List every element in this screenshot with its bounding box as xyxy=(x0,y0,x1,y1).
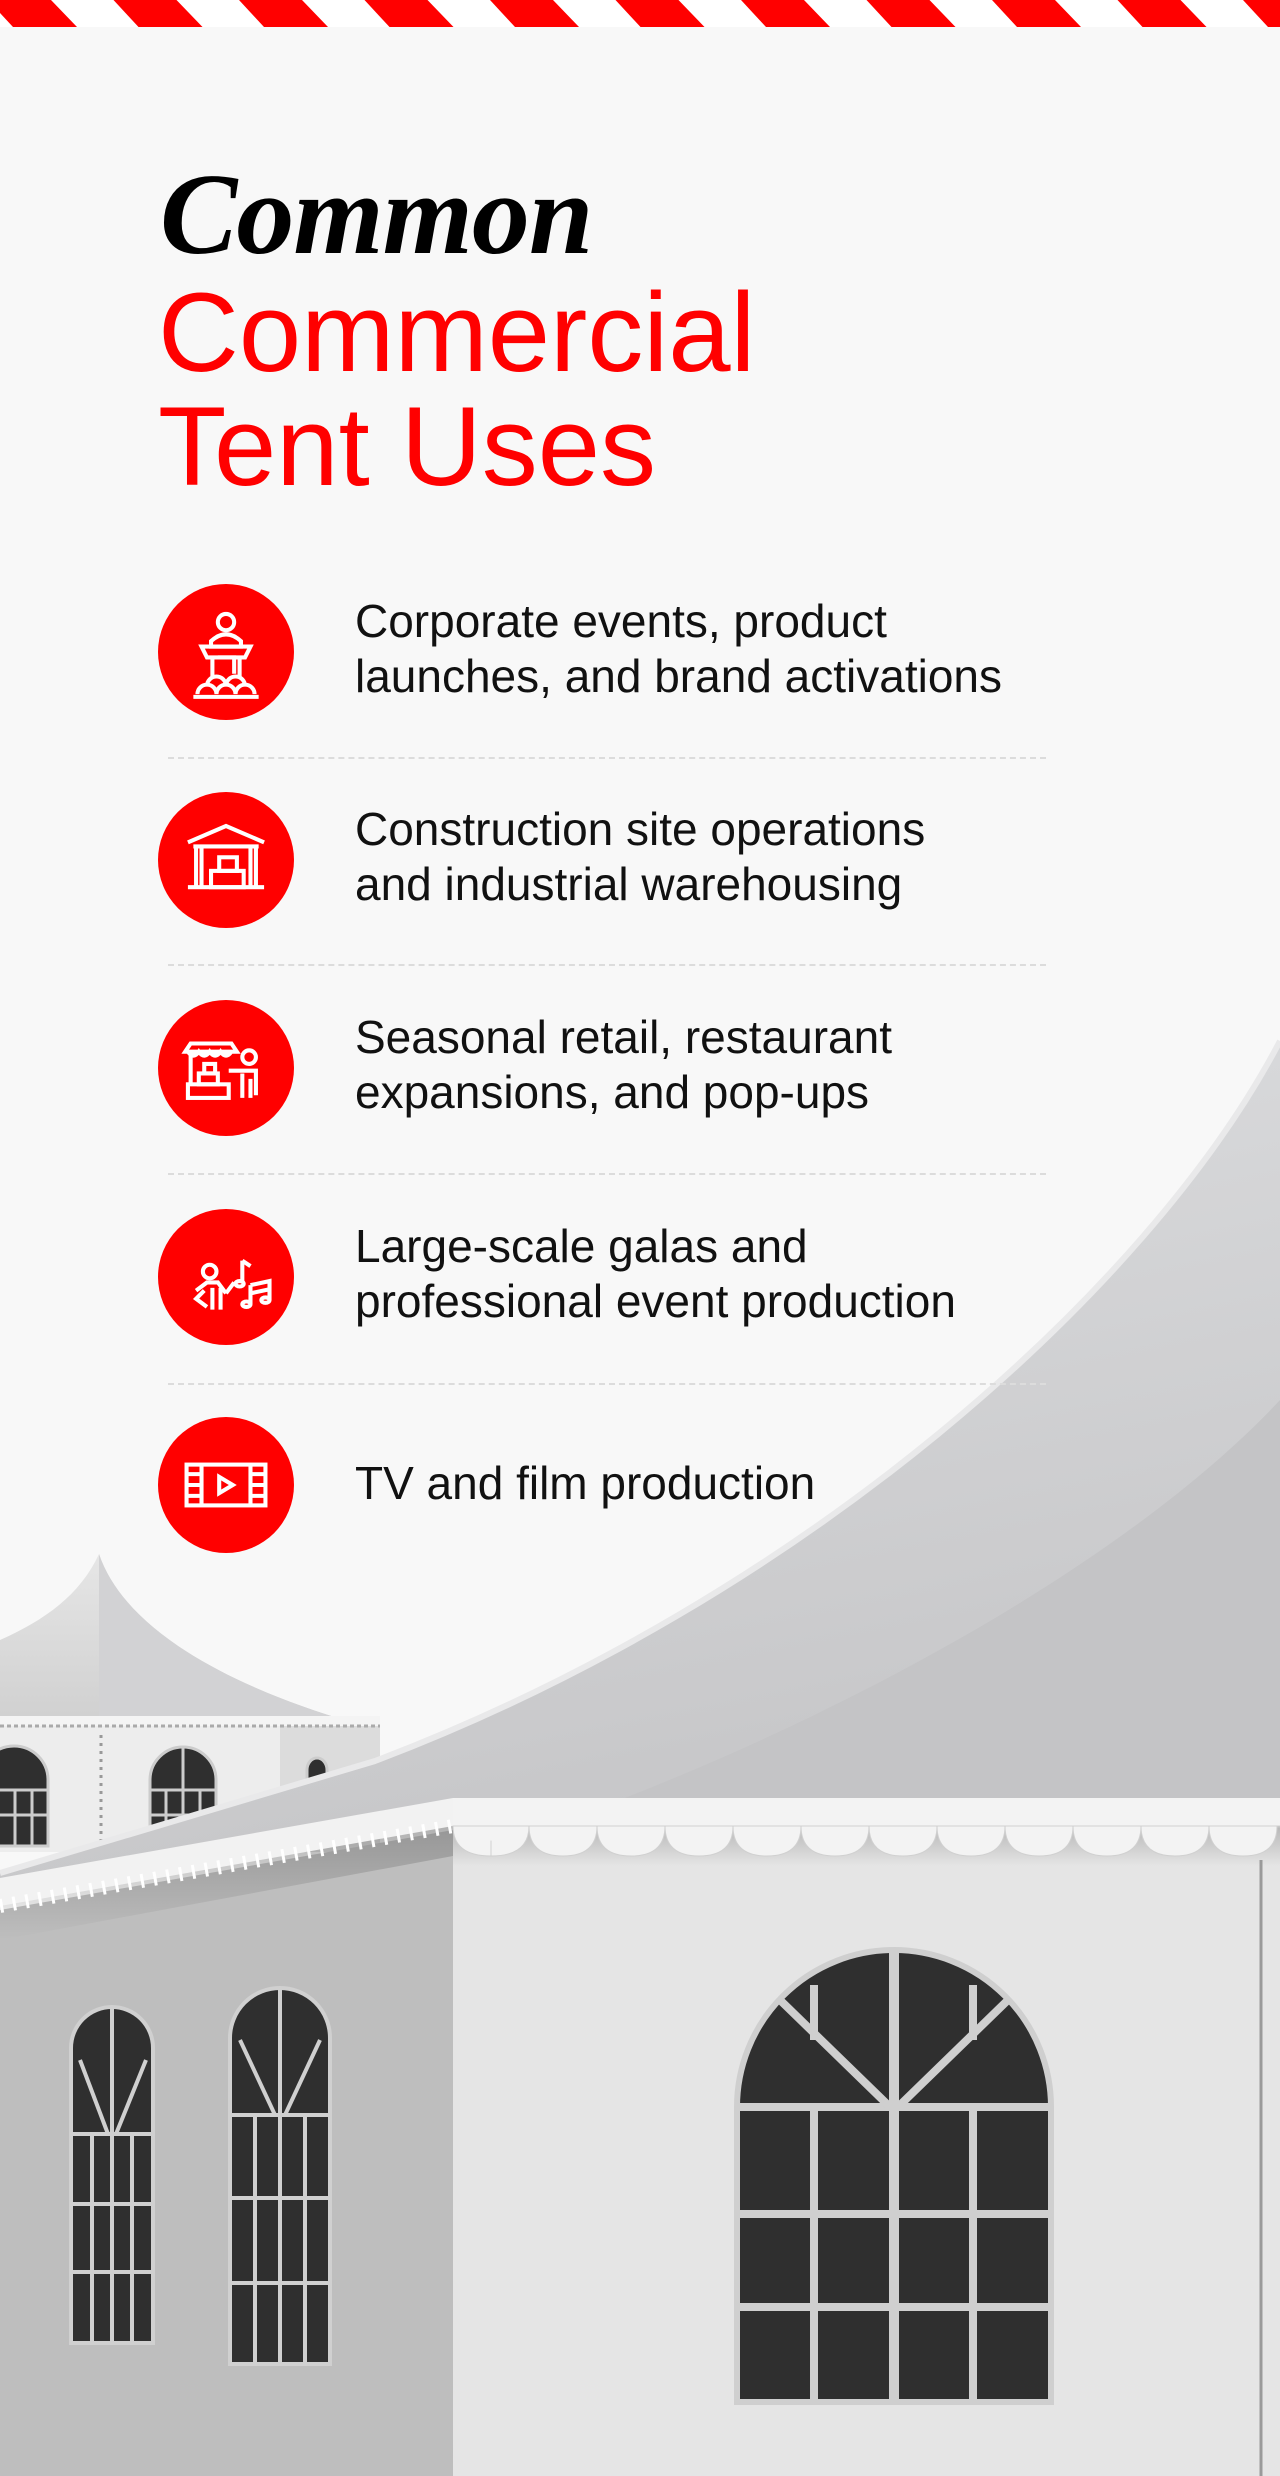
left windows xyxy=(71,1988,330,2364)
icon: warehouse xyxy=(158,792,294,928)
small tent xyxy=(0,1554,380,1852)
title line: Commercial: Commercial xyxy=(158,270,755,395)
icon: retail stall xyxy=(158,1000,294,1136)
icon: music performance xyxy=(158,1209,294,1345)
text: construction: Construction site operations xyxy=(355,803,925,855)
text: retail xyxy=(355,1011,892,1118)
text: retail: expansions, and pop-ups xyxy=(355,1066,869,1118)
main roof xyxy=(0,1041,1280,1900)
title line: Tent Uses: Tent Uses xyxy=(158,384,656,509)
text: construction xyxy=(355,803,925,910)
right wall xyxy=(453,1798,1280,2476)
text: corporate: launches, and brand activations xyxy=(355,650,1002,702)
text: retail: Seasonal retail, restaurant xyxy=(355,1011,892,1063)
left wall xyxy=(0,1798,453,2476)
icon: film strip xyxy=(158,1417,294,1553)
big window xyxy=(737,1950,1051,2402)
top stripe band xyxy=(0,0,1280,27)
text: galas xyxy=(355,1220,956,1327)
text: galas: professional event production xyxy=(355,1275,956,1327)
text: film: TV and film production xyxy=(355,1457,815,1509)
icon: presenter podium xyxy=(158,584,294,720)
title line: Common: Common xyxy=(160,151,592,279)
text: construction: and industrial warehousing xyxy=(355,858,902,910)
text: corporate xyxy=(355,595,1002,702)
title xyxy=(158,151,755,509)
text: galas: Large-scale galas and xyxy=(355,1220,808,1272)
text: corporate: Corporate events, product xyxy=(355,595,887,647)
